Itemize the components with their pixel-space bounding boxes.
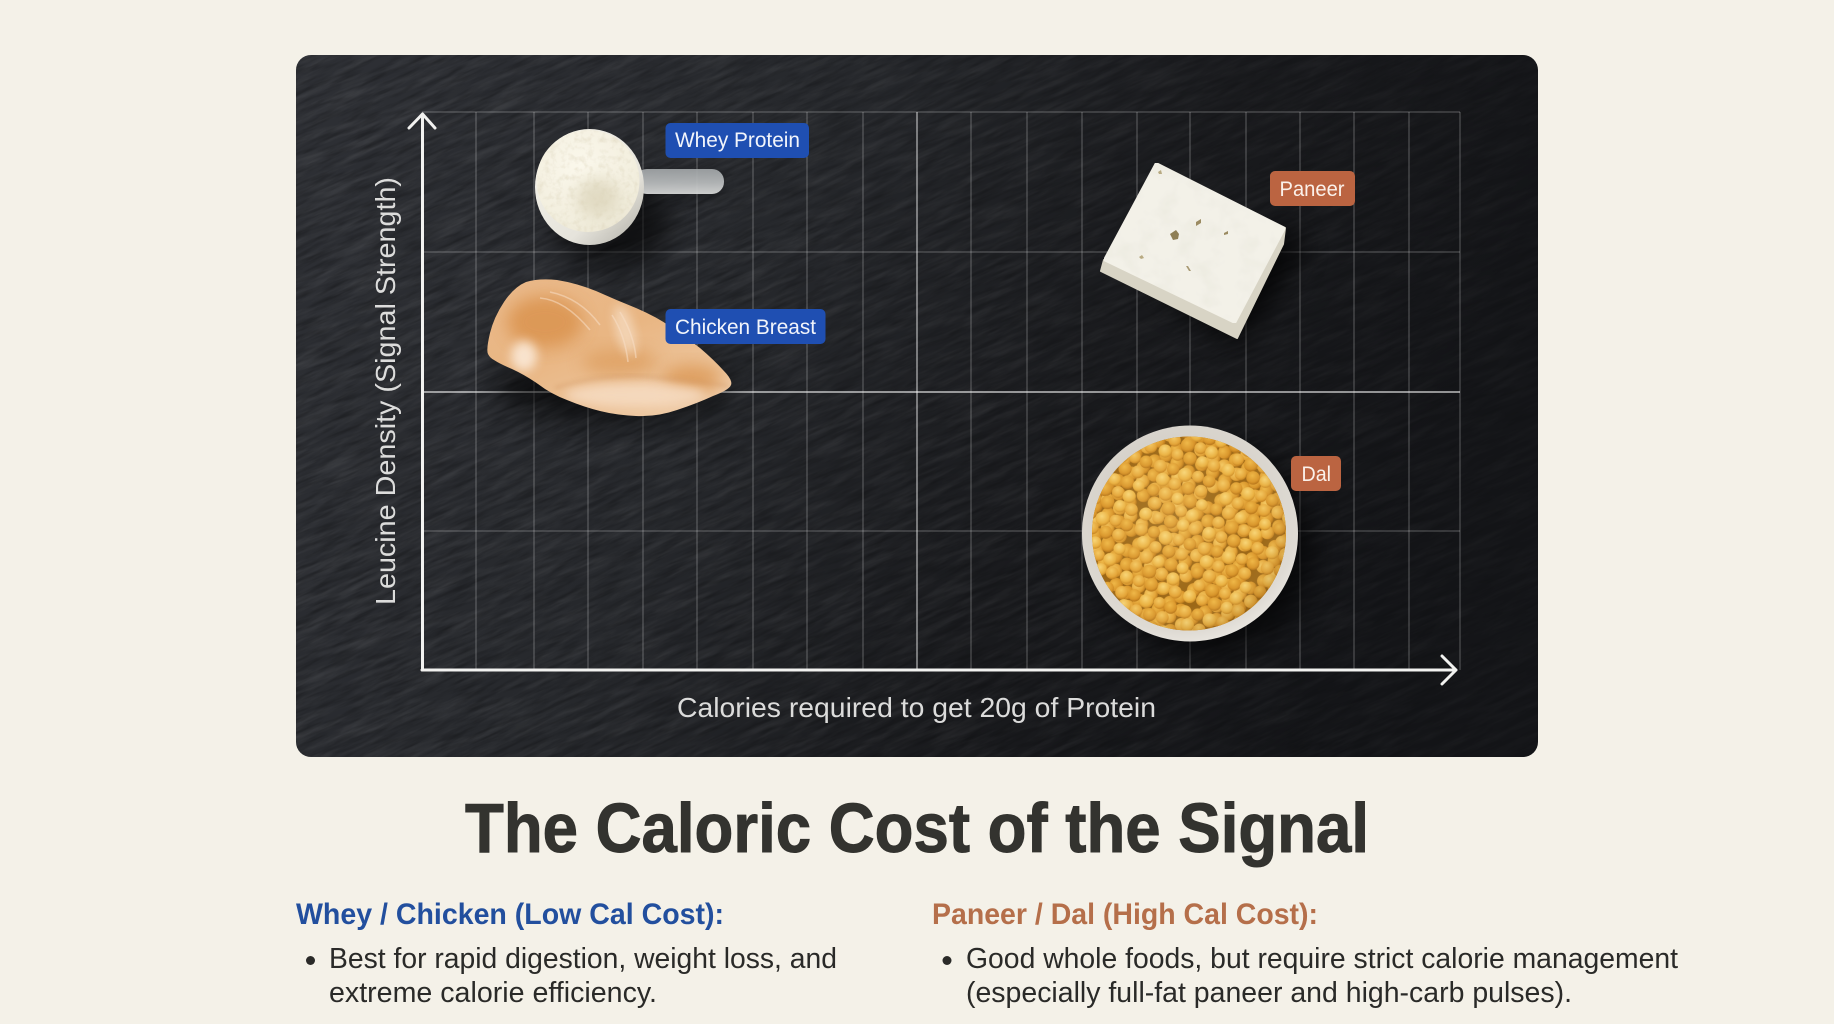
panel: high calorie cost column [932, 898, 1678, 1009]
slate texture background [296, 55, 1538, 757]
panel: slate chart board [296, 55, 1538, 757]
icon: whey protein scoop [535, 129, 724, 266]
label: whey protein: Whey Protein [675, 129, 800, 152]
label: whey protein [666, 123, 809, 158]
bullet text line 2: (especially full-fat paneer and high-carb pulses). [966, 977, 1572, 1009]
bullet point [942, 956, 952, 965]
title: The Caloric Cost of the Signal [465, 789, 1369, 867]
heading: paneer / dal: Paneer / Dal (High Cal Cost): [932, 898, 1318, 931]
icon: bowl of dal [1082, 426, 1314, 656]
bullet text line 1: Best for rapid digestion, weight loss, and [329, 943, 837, 975]
panel: low calorie cost column [296, 898, 837, 1009]
x axis arrow [422, 656, 1456, 684]
y axis arrow [409, 114, 435, 670]
bullet text line 1: Good whole foods, but require strict calorie management [966, 943, 1678, 975]
label: dal [1291, 456, 1341, 491]
label: chicken breast: Chicken Breast [675, 316, 816, 339]
icon: paneer block [1101, 163, 1302, 345]
x axis label: Calories required to get 20g of Protein [677, 692, 1156, 723]
chart grid [422, 112, 1460, 670]
label: paneer [1270, 171, 1355, 206]
label: chicken breast [666, 309, 826, 344]
icon: chicken breast [487, 279, 731, 421]
label: paneer: Paneer [1280, 178, 1345, 201]
bullet point [306, 956, 315, 965]
y axis label: Leucine Density (Signal Strength) [370, 177, 401, 605]
label: dal: Dal [1302, 463, 1331, 486]
bullet text line 2: extreme calorie efficiency. [329, 977, 657, 1009]
heading: whey / chicken: Whey / Chicken (Low Cal Cost): [296, 898, 724, 931]
